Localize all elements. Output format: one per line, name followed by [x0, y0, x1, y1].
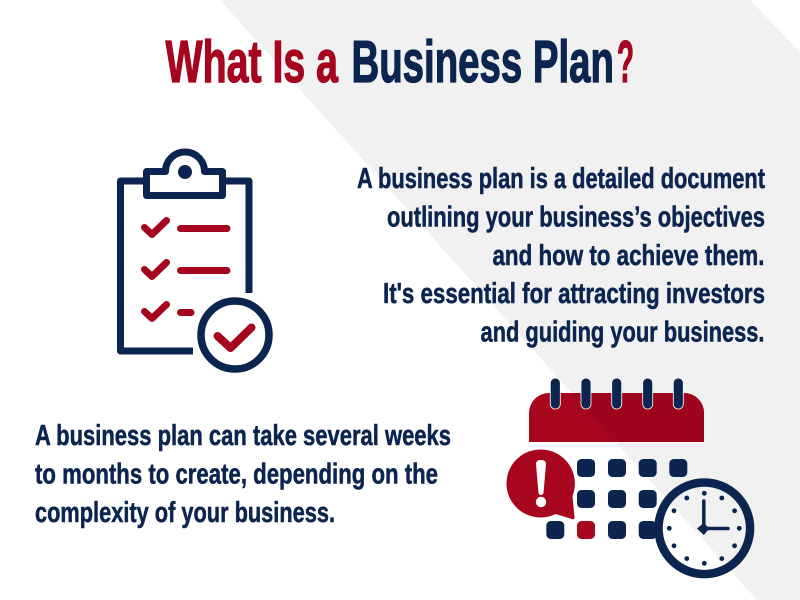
clipboard clip: [146, 152, 222, 196]
text block: definition: [357, 163, 765, 348]
infographic canvas: ?: [617, 29, 634, 95]
calendar rings: [550, 378, 683, 409]
clock ring: [658, 482, 750, 574]
clock centre: [697, 523, 710, 535]
icon: calendar with alert and clock: [506, 378, 750, 574]
clipboard board outline: [120, 181, 249, 351]
alert speech bubble: [506, 449, 575, 519]
checklist row 1: [144, 220, 227, 234]
clip hole: [178, 165, 192, 179]
clock: [658, 482, 750, 574]
completed badge ring: [201, 301, 269, 369]
checklist row 2: [144, 262, 227, 276]
text block: time to create: complexity of your business.: [35, 497, 335, 529]
background diagonal band: [220, 0, 800, 600]
checklist row 3: [144, 304, 191, 318]
title: What Is a: [166, 29, 339, 95]
calendar header: [529, 393, 704, 442]
clock hands: [704, 501, 728, 528]
clock hour dots: [667, 491, 742, 566]
text block: time to create: to months to create, depending on the: [35, 458, 438, 490]
completed badge check: [218, 328, 252, 348]
exclamation mark: [536, 460, 546, 507]
calendar header shaded part: [570, 393, 704, 442]
text block: time to create: A business plan can take several weeks: [35, 420, 451, 452]
title: Business Plan: [352, 29, 614, 95]
calendar day grid: [546, 459, 687, 539]
icon: clipboard checklist: [120, 152, 269, 369]
text block: time to create: [35, 420, 451, 529]
title: [166, 29, 634, 95]
